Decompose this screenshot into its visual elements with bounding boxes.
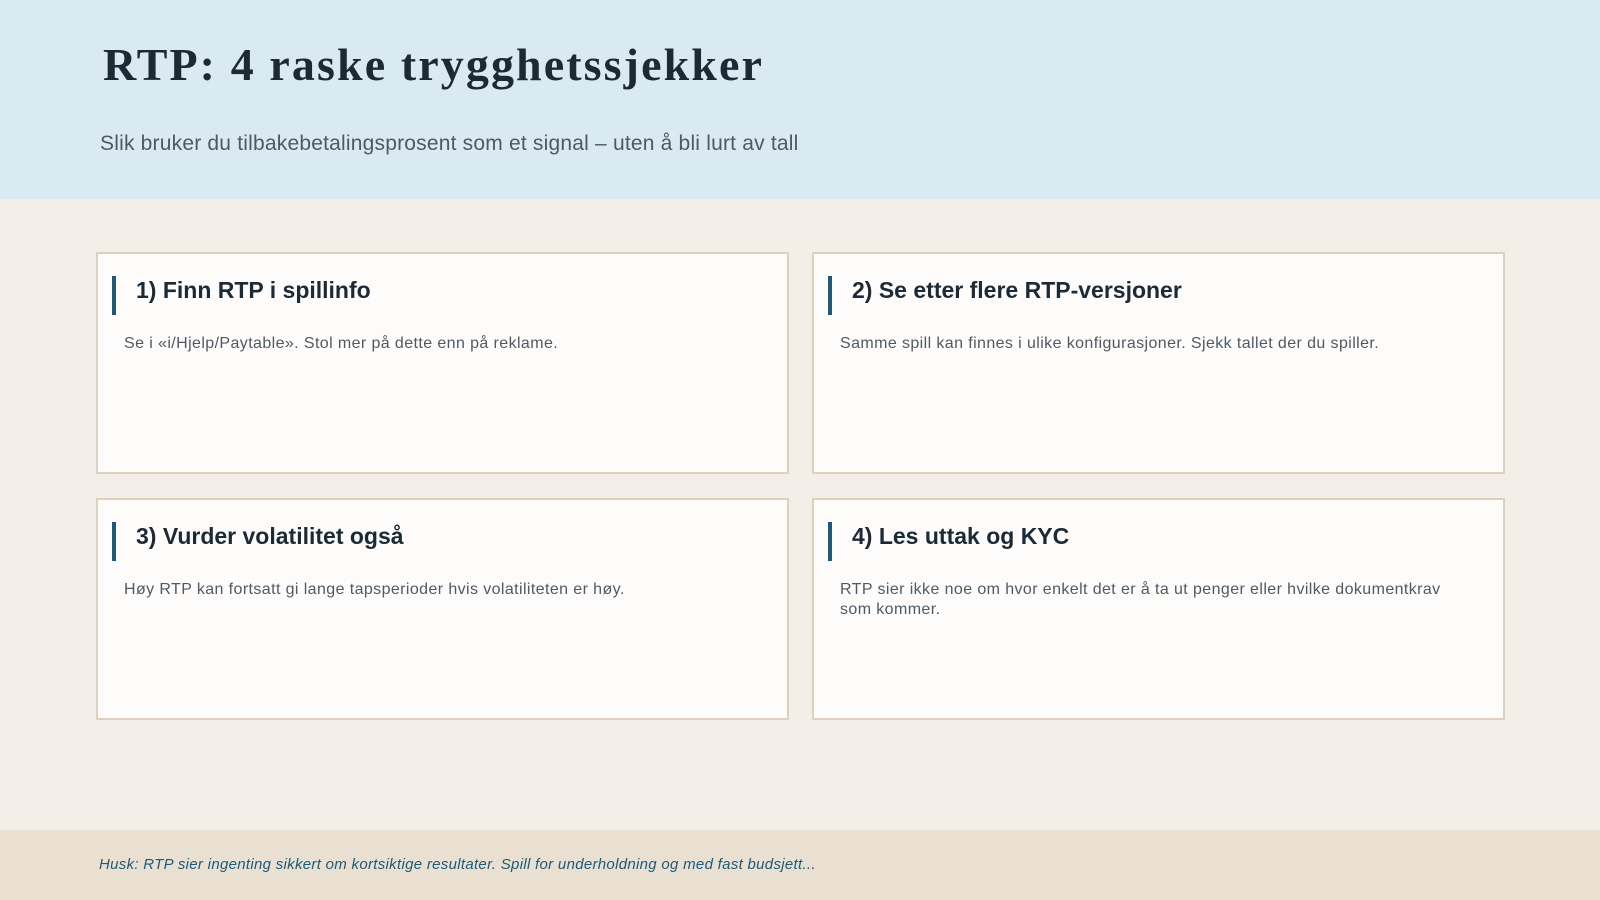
text 1: Se i «i/Hjelp/Paytable». Stol mer på dette enn på reklame. <box>124 335 558 352</box>
panel: card 4 <box>812 498 1505 720</box>
heading 1 <box>112 276 371 315</box>
heading 4 <box>828 522 1069 561</box>
panel: card 1 <box>96 252 789 474</box>
heading 2 <box>828 276 1182 315</box>
text 2: Samme spill kan finnes i ulike konfigurasjoner. Sjekk tallet der du spiller. <box>840 335 1379 352</box>
heading 3: 3) Vurder volatilitet også <box>136 523 404 549</box>
heading 3 <box>112 522 404 561</box>
footer <box>0 830 1600 900</box>
heading 1: 1) Finn RTP i spillinfo <box>136 277 371 303</box>
subtitle: Slik bruker du tilbakebetalingsprosent som et signal – uten å bli lurt av tall <box>100 132 798 155</box>
text 4: RTP sier ikke noe om hvor enkelt det er å ta ut penger eller hvilke dokumentkrav som kommer. <box>840 581 1441 618</box>
heading 2: 2) Se etter flere RTP-versjoner <box>852 277 1182 303</box>
panel: card 3 <box>96 498 789 720</box>
heading 4: 4) Les uttak og KYC <box>852 523 1069 549</box>
footer note: Husk: RTP sier ingenting sikkert om kortsiktige resultater. Spill for underholdning og med fast budsjett... <box>99 856 816 873</box>
panel: card 2 <box>812 252 1505 474</box>
text 3: Høy RTP kan fortsatt gi lange tapsperioder hvis volatiliteten er høy. <box>124 581 625 598</box>
title: RTP: 4 raske trygghetssjekker <box>103 39 764 90</box>
header <box>0 0 1600 199</box>
